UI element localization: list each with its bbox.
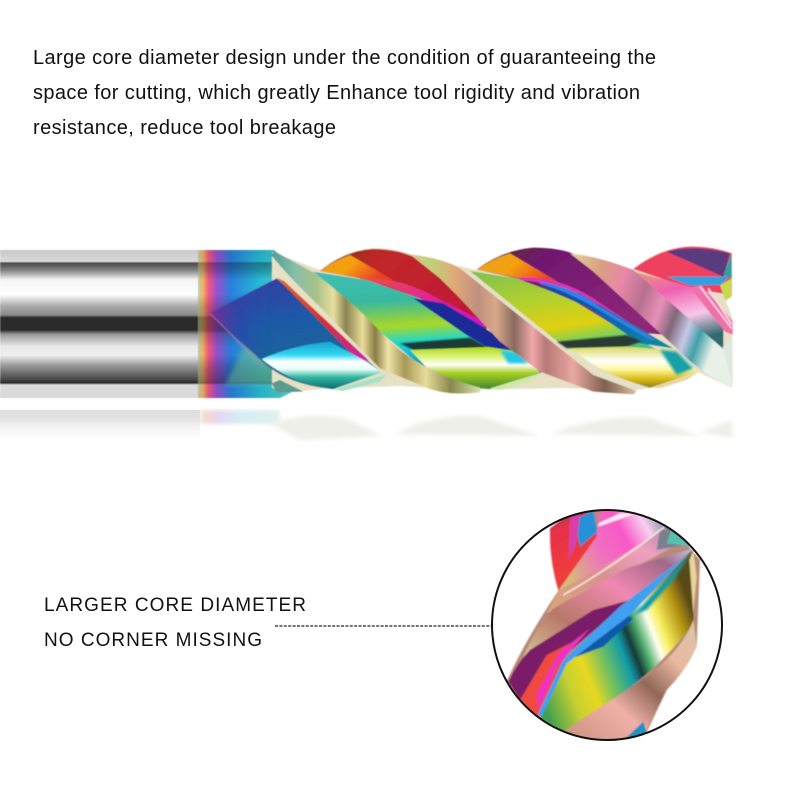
flutes and lobes, right section — [470, 247, 733, 388]
lower ribbon — [563, 620, 697, 743]
text block: core diameter description: resistance, reduce tool breakage — [33, 117, 336, 139]
lobe 3 — [633, 247, 732, 300]
silhouette base — [272, 247, 732, 392]
lobe 2 — [477, 248, 667, 335]
flute 3 — [470, 271, 698, 388]
lobe 1 — [320, 249, 487, 335]
shank — [0, 250, 200, 398]
tip — [690, 285, 733, 385]
label: larger core diameter: LARGER CORE DIAMETER — [44, 595, 306, 616]
end mill tool — [0, 247, 733, 398]
magnified detail circle — [492, 507, 722, 747]
red lobe — [550, 507, 597, 591]
text block: core diameter description: Large core diameter design under the condition of guaranteeing the — [33, 47, 656, 69]
flutes and lobes, left section — [210, 249, 542, 394]
text block: core diameter description — [33, 47, 656, 139]
text block: core diameter description: space for cutting, which greatly Enhance tool rigidity and vibration — [33, 82, 640, 104]
label: no corner missing: NO CORNER MISSING — [44, 630, 262, 651]
flute 2 — [313, 272, 542, 390]
flute 4 — [628, 270, 723, 350]
reflection under end mill — [0, 410, 732, 440]
ribbon 1 — [271, 252, 480, 394]
silhouette base — [507, 507, 700, 747]
pink ribbon bands — [508, 527, 693, 717]
upper pink flute — [558, 507, 670, 591]
main flute — [538, 550, 693, 732]
ribbon 2 — [410, 254, 637, 394]
circle outline — [492, 510, 722, 740]
coated collar — [198, 250, 300, 398]
flute 1 — [210, 278, 387, 391]
ribbon 3 — [570, 253, 733, 388]
dashed leader line — [275, 625, 492, 627]
bottom teal corner — [625, 721, 648, 738]
right edge sliver — [689, 550, 697, 613]
